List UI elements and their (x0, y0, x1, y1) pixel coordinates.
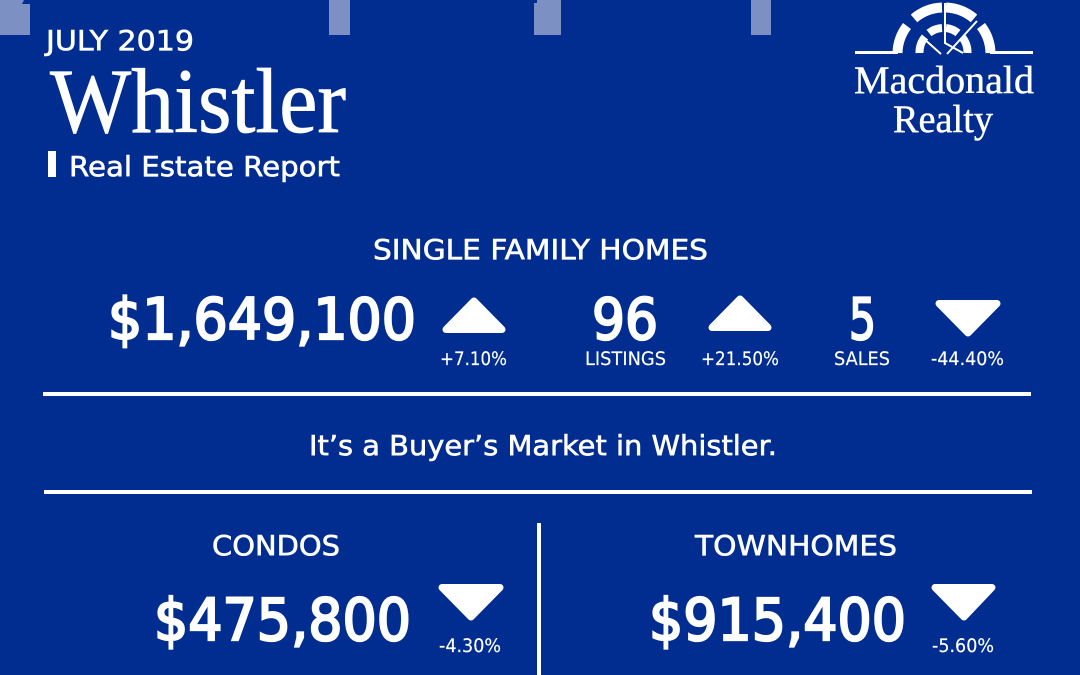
header: date: JULY 2019 (44, 24, 194, 57)
title: Whistler: Whistler (50, 50, 346, 152)
sales label: SALES (834, 348, 890, 370)
subtitle marker bar (48, 151, 56, 177)
logo wordmark: Macdonald (854, 59, 1035, 102)
sales count: 5 (849, 287, 876, 353)
logo: Macdonald Realty (854, 3, 1035, 141)
price: $475,800 (154, 586, 411, 654)
logo emblem (855, 3, 1033, 54)
subtitle: Real Estate Report (69, 150, 340, 183)
top tabs (0, 0, 771, 35)
logo: Macdonald Realty: Realty (893, 98, 993, 141)
heading: SINGLE FAMILY HOMES (373, 233, 708, 266)
listings count: 96 (592, 287, 658, 353)
icon: up triangle listings (712, 299, 768, 328)
panel: condos (154, 529, 501, 657)
heading: CONDOS (212, 529, 340, 562)
sales change: -44.40% (931, 348, 1004, 370)
panel: single family homes (108, 233, 1004, 370)
icon: down triangle (442, 588, 500, 617)
listings change: +21.50% (701, 348, 779, 370)
icon: up triangle price (446, 301, 502, 330)
change: -5.60% (932, 635, 994, 657)
price change: +7.10% (440, 348, 507, 370)
panel: townhomes (649, 529, 994, 657)
market statement: It’s a Buyer’s Market in Whistler. (309, 429, 777, 462)
icon: down triangle (935, 588, 992, 617)
price: $915,400 (649, 586, 906, 654)
price: $1,649,100 (108, 287, 416, 353)
icon: down triangle sales (939, 304, 997, 333)
listings label: LISTINGS (585, 348, 666, 370)
heading: TOWNHOMES (694, 529, 897, 562)
change: -4.30% (439, 635, 501, 657)
